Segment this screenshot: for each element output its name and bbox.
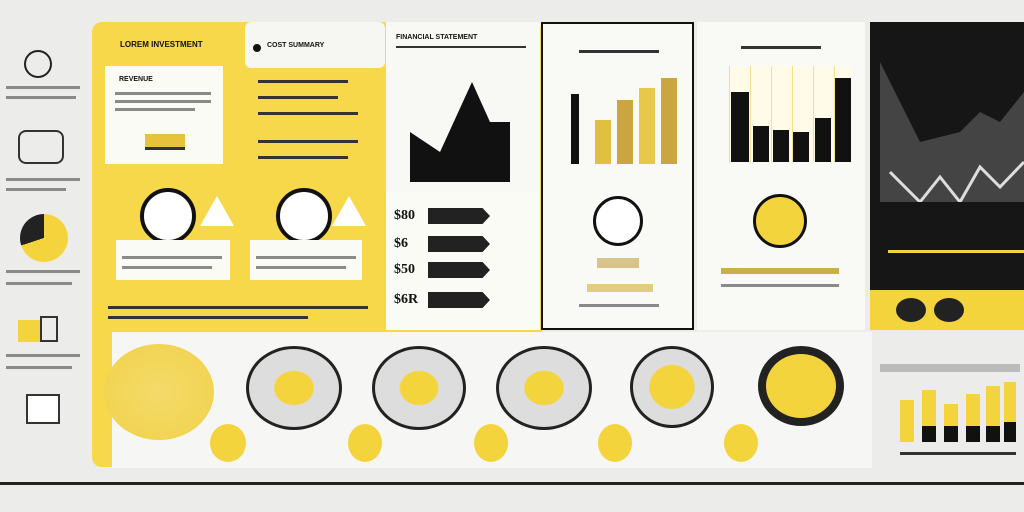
icon: magnifier 1 bbox=[140, 188, 196, 244]
bottom band bbox=[112, 332, 872, 468]
text box right bbox=[250, 240, 362, 280]
icon: pie bbox=[20, 214, 68, 262]
panel: line chart bbox=[386, 22, 540, 192]
left sidebar bbox=[6, 50, 80, 424]
bottom circles row bbox=[104, 344, 214, 440]
bottom right chart bbox=[880, 364, 1020, 455]
panel: grid chart bbox=[697, 22, 865, 330]
arrow list: $6 bbox=[394, 236, 408, 251]
icon: coin bbox=[24, 50, 52, 78]
baseline bbox=[0, 482, 1024, 485]
icon: magnifier 2 bbox=[276, 188, 332, 244]
arrow list bbox=[394, 208, 490, 308]
text: LOREM INVESTMENT bbox=[120, 40, 203, 49]
panel: card 1 bbox=[105, 66, 223, 164]
icon: house bbox=[18, 130, 64, 164]
arrow list: $6R bbox=[394, 292, 418, 307]
panel: bar chart bbox=[541, 22, 694, 330]
panel: dark chart bbox=[870, 22, 1024, 290]
panel: card 1: REVENUE bbox=[119, 76, 153, 83]
icon: yellow box bbox=[18, 320, 40, 342]
arrow list: $50 bbox=[394, 262, 415, 277]
yellow main panel bbox=[92, 22, 542, 467]
icon: building bbox=[145, 134, 185, 150]
arrow list: $80 bbox=[394, 208, 415, 223]
panel: line chart: FINANCIAL STATEMENT bbox=[396, 34, 477, 41]
icon: chart box bbox=[26, 394, 60, 424]
panel: card 2 bbox=[245, 22, 385, 68]
text box left bbox=[116, 240, 230, 280]
panel: card 2: COST SUMMARY bbox=[267, 42, 324, 49]
